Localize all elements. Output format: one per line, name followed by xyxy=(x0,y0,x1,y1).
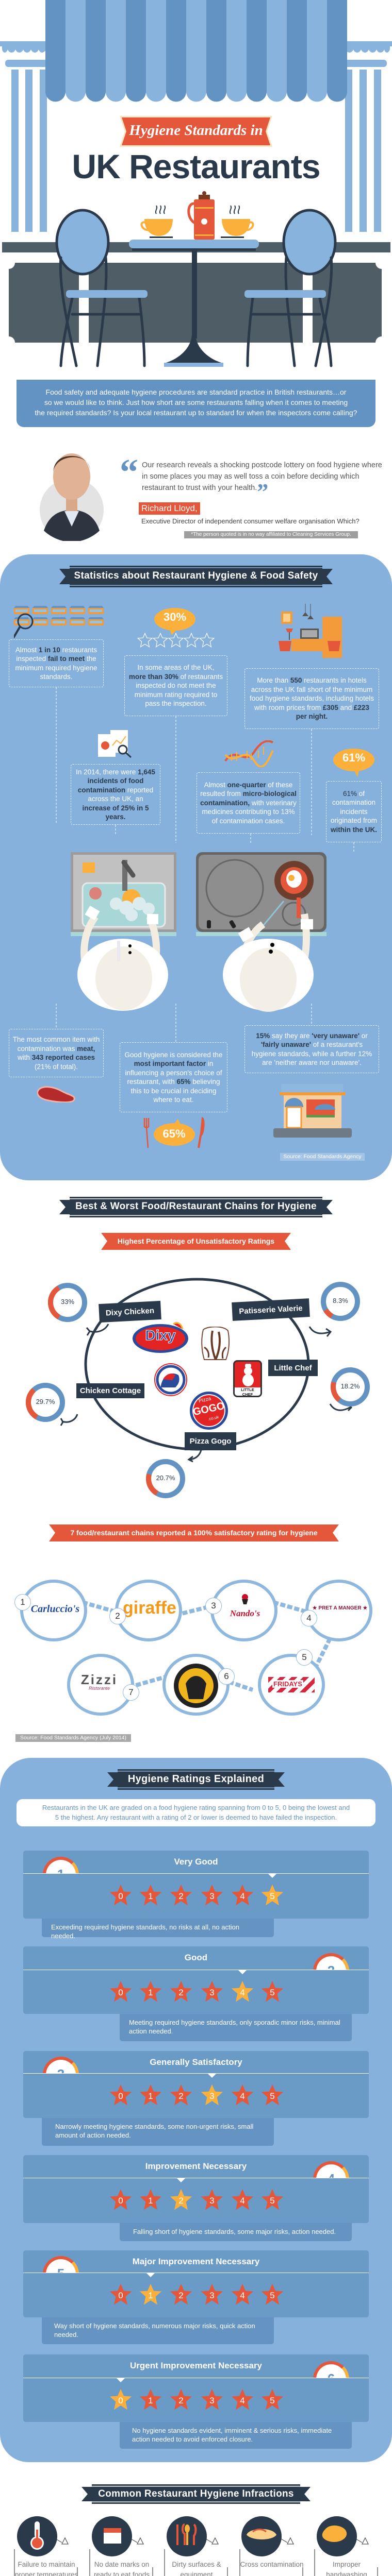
rating card: Urgent Improvement Necessary: 3 xyxy=(209,2396,215,2405)
illustration: chef cooking at stove xyxy=(196,852,326,1012)
donut: 29.7%: 29.7% xyxy=(36,1398,55,1405)
title banner: Hygiene Standards in xyxy=(120,116,272,147)
logo: Pizza Gogo: GOGO xyxy=(192,1400,226,1418)
stat: 1 in 10: Almost 1 in 10 restaurants inspected fail to meet the minimum required hygiene standards. xyxy=(15,646,97,681)
donut: 29.7% xyxy=(26,1383,65,1422)
description: generally satisfactory xyxy=(42,2118,274,2146)
label: Pizza Gogo xyxy=(185,1432,236,1450)
header illustration: cafe scene xyxy=(0,0,392,367)
rating card: Major Improvement Necessary: 1 xyxy=(148,2291,153,2300)
icon: meat steak xyxy=(37,1086,75,1103)
intro text box: so we would like to think. Just how short are some restaurants falling when it comes to meeting xyxy=(44,398,348,406)
label: Chicken Cottage: Chicken Cottage xyxy=(80,1386,141,1395)
heading ribbon: Common Restaurant Hygiene Infractions: Common Restaurant Hygiene Infractions xyxy=(98,2488,294,2499)
rating card: Very Good: 4 xyxy=(240,1891,245,1901)
heading ribbon: Hygiene Ratings Explained: Hygiene Ratings Explained xyxy=(128,1773,264,1785)
logo: Zizzi: Ristorante xyxy=(89,1686,110,1691)
heading ribbon: Best & Worst: Best & Worst Food/Restaurant Chains for Hygiene xyxy=(75,1201,317,1212)
rating card: Generally Satisfactory: Generally Satisfactory xyxy=(150,2057,242,2067)
callout: 61% xyxy=(333,749,374,777)
number badges: 1 xyxy=(20,1597,25,1607)
rating card: Major Improvement Necessary: 4 xyxy=(240,2291,245,2300)
description: improvement necessary: Falling short of hygiene standards, some major risks, action needed. xyxy=(133,2228,336,2235)
rating card: Major Improvement Necessary: 2 xyxy=(178,2291,184,2300)
callout: 65% with cutlery: 65% xyxy=(162,1127,186,1140)
stat: one-quarter xyxy=(197,772,300,834)
stat: 15% unaware xyxy=(244,1025,379,1073)
awning xyxy=(45,0,347,102)
icon: restaurant fronts with magnifier xyxy=(14,606,104,638)
rating card: Urgent Improvement Necessary: 4 xyxy=(240,2396,245,2405)
rating card: Generally Satisfactory: 1 xyxy=(148,2091,153,2101)
number badges: 5 xyxy=(302,1652,307,1662)
label: Little Chef: Little Chef xyxy=(274,1363,312,1372)
logo: Pizza Gogo: Pizza xyxy=(198,1396,211,1404)
rating card: Generally Satisfactory: 5 xyxy=(270,2091,275,2101)
heading ribbon: Common Restaurant Hygiene Infractions xyxy=(81,2484,311,2504)
logo: Nando's xyxy=(230,1594,260,1618)
rating card: Urgent Improvement Necessary: 1 xyxy=(148,2396,153,2405)
donut: 20.7%: 20.7% xyxy=(156,1474,175,1482)
rating card: Good: 4 xyxy=(240,1988,245,1997)
rating card: Good: 0 xyxy=(118,1988,123,1997)
rating card: Improvement Necessary: 3 xyxy=(209,2196,215,2206)
stat: 1 in 10 xyxy=(9,639,104,687)
logo: TGI Fridays: FRIDAYS xyxy=(273,1680,302,1688)
rating card: Improvement Necessary: 2 xyxy=(178,2196,184,2206)
donut: 33%: 33% xyxy=(61,1298,74,1306)
label: Pizza Gogo: Pizza Gogo xyxy=(190,1437,231,1446)
intro text box: the required standards? Is your local restaurant up to standard for when the inspectors come calling? xyxy=(35,409,357,417)
rating card: Urgent Improvement Necessary: Urgent Improvement Necessary xyxy=(130,2361,262,2370)
rating card: Improvement Necessary: 5 xyxy=(270,2196,275,2206)
description: improvement necessary xyxy=(120,2223,352,2241)
rating card: Very Good: 0 xyxy=(118,1891,123,1901)
panel: statistics xyxy=(0,554,392,1180)
sub-heading: 7 chains 100% xyxy=(49,1524,339,1541)
rating card: Improvement Necessary: Improvement Necessary xyxy=(145,2161,247,2171)
logo: Pret A Manger: ★ PRET A MANGER ★ xyxy=(313,1605,367,1611)
donut: 8.3% xyxy=(321,1282,360,1321)
rating card: Good: 1 xyxy=(148,1988,153,1997)
portrait photo xyxy=(40,453,104,541)
stat: 61%: 61% of contamination incidents originated from within the UK. xyxy=(331,790,377,834)
stat: 30%: In some areas of the UK, more than 30% of restaurants inspected do not meet the minimum rating required to pass the inspection. xyxy=(129,664,223,707)
donut: 20.7% xyxy=(145,1459,185,1498)
title: UK Restaurants: UK Restaurants xyxy=(72,147,320,185)
logo: West Cornwall Pasty xyxy=(174,1664,218,1708)
stat: 30% xyxy=(124,655,227,716)
logo: Dixy: Dixy xyxy=(145,1327,176,1343)
label: Little Chef xyxy=(268,1360,318,1376)
sub-heading: 7 chains 100%: 7 food/restaurant chains reported a 100% satisfactory rating for hygiene xyxy=(70,1529,318,1537)
disclaimer: *The person quoted is in no way affiliated to Cleaning Services Group. xyxy=(191,532,351,537)
rating card: Very Good: 5 xyxy=(270,1891,275,1901)
description: major improvement xyxy=(42,2317,274,2344)
intro white box xyxy=(17,1799,375,1826)
number badges xyxy=(14,1594,317,1701)
label: Dixy Chicken xyxy=(99,1301,161,1323)
logo: Dixy xyxy=(133,1322,188,1353)
source tag: FSA July 2014: Source: Food Standards Agency (July 2014) xyxy=(20,1735,126,1741)
stat: one-quarter: Almost one-quarter of these resulted from micro-biological contamination, with veterinary medicines contributing to 13% of contamination cases. xyxy=(200,781,297,825)
rating card: Very Good: 2 xyxy=(178,1891,184,1901)
label: Dixy Chicken: Dixy Chicken xyxy=(106,1306,154,1317)
icon: hotel room xyxy=(279,604,342,658)
infractions grid: Cross contamination xyxy=(240,2561,304,2568)
icon: DNA xyxy=(224,740,274,767)
chart: chain ellipse of worst chains xyxy=(26,1278,370,1498)
icon: charts with magnifier xyxy=(98,730,132,758)
rating card: Good xyxy=(23,1946,369,2014)
number badges: 7 xyxy=(128,1687,134,1697)
panel: hygiene ratings explained xyxy=(0,1758,392,2462)
logo: Chicken Cottage xyxy=(154,1363,187,1396)
heading ribbon: Statistics xyxy=(59,566,333,587)
donut: 18.2% xyxy=(331,1367,370,1406)
quote section: Our research reveals a shocking postcode lottery on food hygiene where in some places you may as well toss a coin before deciding which restaurant to trust with your health.” xyxy=(142,461,382,504)
label: Chicken Cottage xyxy=(76,1383,144,1398)
heading ribbon: Statistics: Statistics about Restaurant Hygiene & Food Safety xyxy=(74,570,318,581)
intro white box: 5 the highest. Any restaurant with a rating of 2 or lower is deemed to have failed the inspection. xyxy=(55,1814,337,1821)
stat: good hygiene 65%: Good hygiene is considered the most important factor in influencing a person's choice of restaurant, with 65% believing this to be crucial in deciding where to eat. xyxy=(125,1051,222,1104)
title banner: Hygiene Standards in: Hygiene Standards in xyxy=(129,122,263,139)
rating card: Generally Satisfactory: 4 xyxy=(240,2091,245,2101)
rating card: Good: 3 xyxy=(209,1988,215,1997)
rating card: Good: Good xyxy=(185,1953,207,1962)
rating card: Good: 2 xyxy=(178,1988,184,1997)
stat: good hygiene 65% xyxy=(120,1042,227,1112)
stat: 1,645 incidents: In 2014, there were 1,645 incidents of food contamination reported across the UK, an increase of 25% in 5 years. xyxy=(76,768,155,821)
description: good: Meeting required hygiene standards, only sporadic minor risks, minimal action needed. xyxy=(129,2019,340,2035)
logo: Pizza Gogo xyxy=(190,1392,228,1430)
side cornices and columns xyxy=(0,41,392,232)
rating card: Major Improvement Necessary: 3 xyxy=(209,2291,215,2300)
rating card: Improvement Necessary: 4 xyxy=(240,2196,245,2206)
quote text: “ xyxy=(120,451,138,493)
number badges: 4 xyxy=(306,1613,312,1623)
logo: Little Chef xyxy=(233,1360,262,1397)
rating card: Improvement Necessary xyxy=(23,2155,369,2223)
label: Patisserie Valerie xyxy=(232,1298,310,1321)
logo: Patisserie Valerie xyxy=(201,1327,230,1360)
rating card: Urgent Improvement Necessary: 0 xyxy=(118,2396,123,2405)
number badges: 2 xyxy=(115,1611,120,1621)
chart: chain of best restaurant logos xyxy=(14,1580,372,1716)
callout: 61%: 61% xyxy=(342,751,365,764)
heading ribbon: Best & Worst xyxy=(59,1197,333,1217)
donut: 8.3%: 8.3% xyxy=(333,1297,348,1304)
label: Patisserie Valerie: Patisserie Valerie xyxy=(239,1303,303,1316)
donut: 18.2%: 18.2% xyxy=(341,1382,360,1390)
rating card: Generally Satisfactory xyxy=(23,2051,369,2118)
logo: Little Chef: CHEF xyxy=(242,1392,253,1397)
rating card: Major Improvement Necessary: Major Improvement Necessary xyxy=(133,2257,259,2266)
rating card: Good: 5 xyxy=(270,1988,275,1997)
stat: 550 hotels xyxy=(244,668,379,729)
stat: meat: The most common item with contamination was meat, with 343 reported cases (21% of total). xyxy=(13,1036,100,1071)
callout: 30% xyxy=(154,608,195,635)
sub-heading: Highest Percentage of Unsatisfactory Ratings: Highest Percentage of Unsatisfactory Ratings xyxy=(118,1237,274,1245)
rating card: Very Good: 1 xyxy=(148,1891,153,1901)
icon: tea cups and pot xyxy=(141,191,253,240)
stat: 15% unaware: 15% say they are 'very unaware' or 'fairly unaware' of a restaurant's hygiene standards, while a further 12% are 'neither aware nor unaware'. xyxy=(252,1031,372,1066)
logo: TGI Fridays xyxy=(268,1677,315,1692)
intro text box xyxy=(17,380,375,427)
logo: Little Chef: LITTLE xyxy=(241,1387,254,1392)
sub-heading: Highest Percentage of Unsatisfactory Ratings xyxy=(101,1233,291,1250)
wall and ledge xyxy=(2,242,390,343)
rating card: Improvement Necessary: 0 xyxy=(118,2196,123,2206)
intro text box: Food safety and adequate hygiene procedures are standard practice in British restaurants…or xyxy=(46,388,346,396)
number badges: 6 xyxy=(224,1671,229,1681)
rating card: Very Good: Very Good xyxy=(174,1857,218,1867)
rating card: Urgent Improvement Necessary xyxy=(23,2354,369,2422)
name label: Richard Lloyd, xyxy=(141,503,198,513)
quote section xyxy=(40,451,382,541)
description: good xyxy=(120,2014,352,2041)
description: very good: Exceeding required hygiene standards, no risks at all, no action needed. xyxy=(51,1923,239,1940)
quote section: Executive Director of independent consumer welfare organisation Which? xyxy=(141,517,360,525)
logo: Carluccio's: Carluccio's xyxy=(31,1603,79,1615)
callout: 30%: 30% xyxy=(164,611,186,623)
rating card: Very Good: 3 xyxy=(209,1891,215,1901)
infractions grid xyxy=(0,2514,392,2576)
rating card: Improvement Necessary: 1 xyxy=(148,2196,153,2206)
table xyxy=(129,240,259,367)
rating card: Generally Satisfactory: 2 xyxy=(178,2091,184,2101)
stat: meat xyxy=(9,1029,104,1077)
rating card: Generally Satisfactory: 3 xyxy=(209,2091,215,2101)
description: urgent improvement xyxy=(120,2422,352,2449)
stat: 61% xyxy=(326,781,382,842)
description: generally satisfactory: Narrowly meeting hygiene standards, some non-urgent risks, small amount of action needed. xyxy=(55,2123,253,2139)
source tag: Source: Food Standards Agency xyxy=(283,1154,362,1160)
chairs xyxy=(57,210,335,366)
logo: Nando's: Nando's xyxy=(230,1608,260,1618)
rating card: Urgent Improvement Necessary: 5 xyxy=(270,2396,275,2405)
number badges: 3 xyxy=(211,1601,216,1611)
logo: Zizzi: Zizzi xyxy=(81,1672,118,1687)
connector lines xyxy=(56,687,354,1042)
description: major improvement: Way short of hygiene standards, numerous major risks, quick action needed. xyxy=(54,2322,255,2338)
rating card: Generally Satisfactory: 0 xyxy=(118,2091,123,2101)
donut: 33% xyxy=(47,1283,87,1322)
description: urgent improvement: No hygiene standards evident, imminent & serious risks, immediate action needed to avoid enforced closure. xyxy=(132,2427,332,2443)
icon: five stars outline xyxy=(137,633,215,648)
description: very good xyxy=(42,1919,274,1937)
rating card: Very Good xyxy=(23,1851,369,1919)
heading ribbon: Hygiene Ratings Explained xyxy=(107,1769,285,1790)
icon: restaurant building xyxy=(273,1084,352,1138)
logo: giraffe: giraffe xyxy=(123,1598,176,1618)
rating card: Urgent Improvement Necessary: 2 xyxy=(178,2396,184,2405)
callout: 65% with cutlery xyxy=(143,1117,205,1148)
rating card: Major Improvement Necessary xyxy=(23,2250,369,2317)
logo: Pizza Gogo: .co.uk xyxy=(207,1415,219,1421)
rating card: Major Improvement Necessary: 5 xyxy=(270,2291,275,2300)
illustration: chef washing at sink xyxy=(71,852,176,1011)
rating card: Major Improvement Necessary: 0 xyxy=(118,2291,123,2300)
intro white box: Restaurants in the UK are graded on a food hygiene rating spanning from 0 to 5, 0 being the lowest and xyxy=(42,1804,350,1811)
stat: 550 hotels: More than 550 restaurants in hotels across the UK fall short of the minimum food hygiene standards, including hotels with room prices from £305 and £223 per night. xyxy=(250,676,374,720)
